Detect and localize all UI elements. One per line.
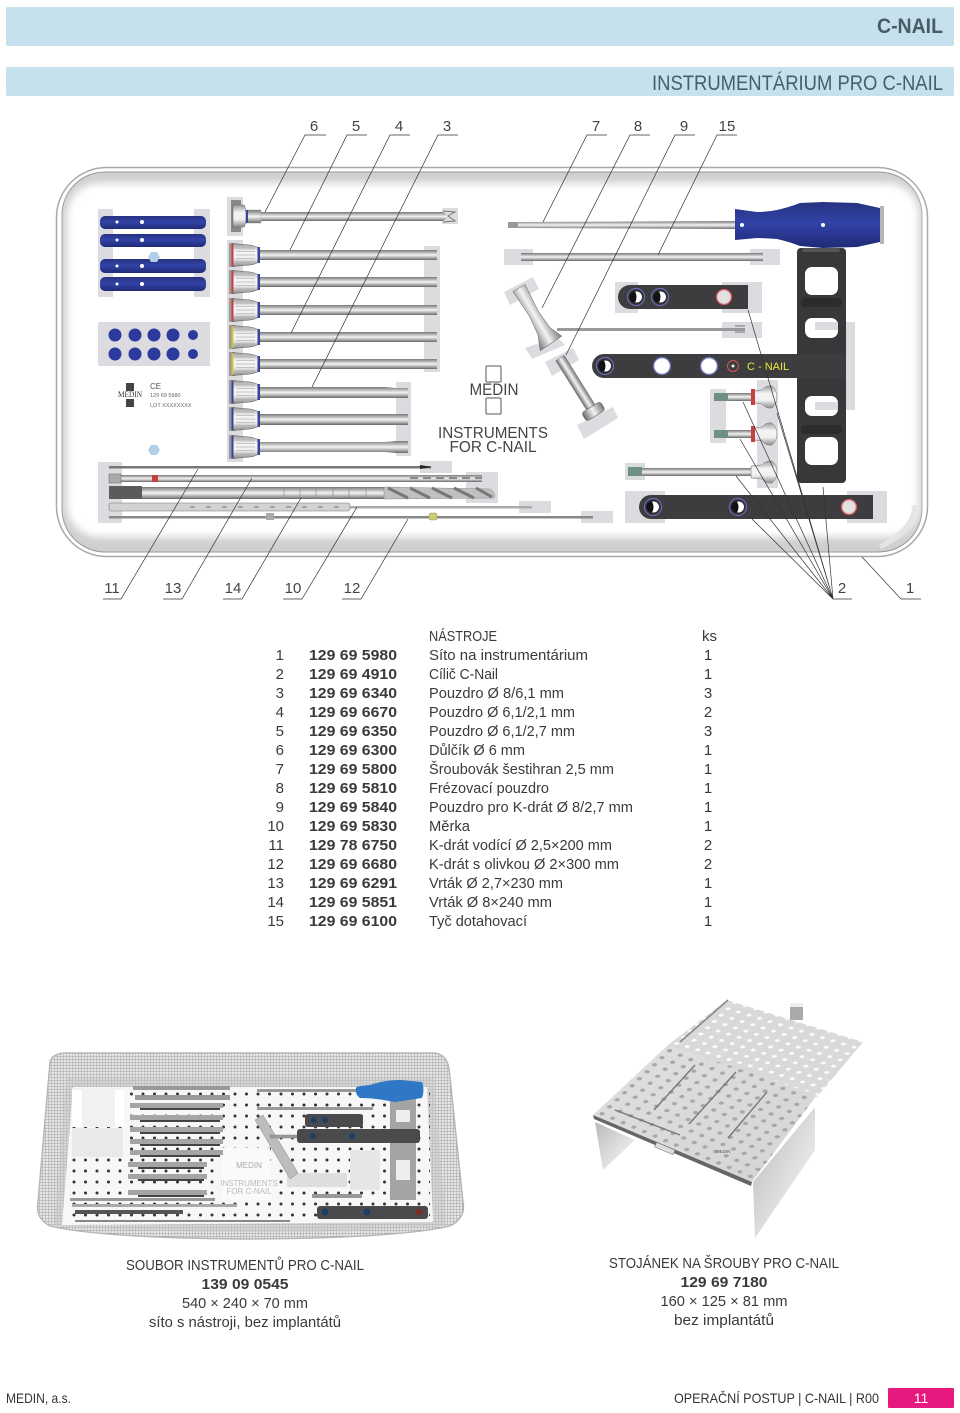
leader lines and numbers: 9: [680, 118, 688, 135]
perforated plate: [62, 1087, 433, 1225]
table rows: Pouzdro pro K-drát Ø 8/2,7 mm: [429, 799, 633, 816]
table rows: 3: [704, 723, 712, 740]
table rows: 1: [704, 666, 712, 683]
page number: 11: [914, 1390, 928, 1406]
table rows: 129 69 5980: [309, 647, 397, 664]
table rows: 3: [704, 685, 712, 702]
photo: blue handle: [356, 1080, 424, 1102]
instrument 2: targeting device: [592, 248, 873, 519]
table rows: 129 69 5810: [309, 780, 397, 797]
instrument 6: pin: [231, 200, 455, 232]
table rows: Tyč dotahovací: [429, 913, 528, 930]
caption: instrument set: [126, 1256, 364, 1331]
table rows: Důlčík Ø 6 mm: [429, 742, 525, 759]
table rows: 2: [704, 856, 712, 873]
table rows: 1: [704, 894, 712, 911]
table rows: 8: [276, 780, 284, 797]
instrument 14: drill 8: [109, 486, 494, 499]
footer document info: OPERAČNÍ POSTUP | C-NAIL | R00: [674, 1390, 879, 1406]
leader lines and numbers: 6: [310, 118, 318, 135]
leader lines and numbers: 11: [104, 580, 120, 597]
leader lines and numbers: 15: [719, 118, 735, 135]
short arm: [618, 285, 748, 309]
table rows: 7: [276, 761, 284, 778]
table rows: 2: [704, 837, 712, 854]
footer: [6, 1388, 954, 1408]
tray rim: [56, 168, 928, 556]
table rows: 6: [276, 742, 284, 759]
instrument 3: sleeves: [229, 380, 408, 459]
table rows: 1: [704, 799, 712, 816]
table rows: 1: [704, 780, 712, 797]
instrument group: blue tubes: [100, 216, 206, 291]
section heading band: [6, 67, 954, 96]
table rows: K-drát s olivkou Ø 2×300 mm: [429, 856, 619, 873]
caption: instrument set: 540 × 240 × 70 mm: [182, 1295, 308, 1312]
photo: dark arms: [297, 1114, 428, 1219]
caption: screw rack: bez implantátů: [674, 1312, 774, 1329]
table rows: 129 69 6350: [309, 723, 397, 740]
leader lines and numbers: 12: [344, 580, 360, 597]
table: instrument list: [267, 628, 717, 930]
tray logo and name: [438, 366, 548, 456]
middle arm: [592, 354, 845, 378]
table rows: 1: [276, 647, 284, 664]
panel: instrument tray: [56, 168, 928, 556]
perforated plate: FOR C-NAIL: [226, 1187, 272, 1196]
table rows: 129 69 6300: [309, 742, 397, 759]
table rows: 2: [276, 666, 284, 683]
table rows: Frézovací pouzdro: [429, 780, 549, 797]
table rows: Síto na instrumentárium: [429, 647, 588, 664]
table rows: Vrták Ø 2,7×230 mm: [429, 875, 563, 892]
rack legs: [595, 1107, 815, 1238]
leader lines and numbers: 13: [165, 580, 181, 597]
table rows: 1: [704, 913, 712, 930]
caption: instrument set: 139 09 0545: [202, 1276, 288, 1293]
table rows: 129 69 6670: [309, 704, 397, 721]
tray logo and name: MEDIN: [470, 380, 518, 399]
table rows: [267, 647, 712, 930]
table rows: 129 69 6680: [309, 856, 397, 873]
table rows: Šroubovák šestihran 2,5 mm: [429, 761, 614, 778]
mesh basket: [38, 1053, 463, 1239]
table header: NÁSTROJE: [429, 628, 497, 645]
table rows: Vrták Ø 8×240 mm: [429, 894, 552, 911]
chapter title: C-NAIL: [877, 15, 943, 38]
table rows: 129 69 6340: [309, 685, 397, 702]
tray logo and name: INSTRUMENTS: [438, 425, 548, 442]
perforated plate: MEDIN: [236, 1161, 262, 1170]
leader lines and numbers: 4: [395, 118, 403, 135]
table rows: 129 69 5800: [309, 761, 397, 778]
table rows: 4: [276, 704, 284, 721]
top header band: [6, 7, 954, 46]
bolts: [628, 386, 777, 483]
table rows: 129 69 5840: [309, 799, 397, 816]
table rows: 129 69 6100: [309, 913, 397, 930]
shafts on the plate: [70, 1086, 373, 1222]
table header: ks: [702, 628, 717, 645]
table rows: 9: [276, 799, 284, 816]
footer company: MEDIN, a.s.: [6, 1390, 71, 1406]
table rows: 129 69 5830: [309, 818, 397, 835]
table rows: 1: [704, 875, 712, 892]
photo: instrument set in mesh basket: [38, 1053, 463, 1239]
photo: screw rack: [593, 1000, 863, 1238]
caption: screw rack: [609, 1255, 839, 1329]
table rows: 129 69 5851: [309, 894, 397, 911]
leader lines and numbers: 5: [352, 118, 360, 135]
table rows: 12: [267, 856, 284, 873]
table rows: 129 69 6291: [309, 875, 397, 892]
leader lines and numbers: 10: [285, 580, 301, 597]
table rows: 13: [267, 875, 284, 892]
tray label: small Medin mark: [118, 382, 192, 409]
table rows: 1: [704, 818, 712, 835]
table rows: 1: [704, 761, 712, 778]
table rows: 129 78 6750: [309, 837, 397, 854]
instrument 10: gauge: [109, 503, 532, 511]
tray label: small Medin mark: LOT XXXXXXXX: [150, 403, 192, 409]
tray logo and name: FOR C-NAIL: [450, 439, 537, 456]
caption: screw rack: STOJÁNEK NA ŠROUBY PRO C-NAIL: [609, 1255, 839, 1272]
instrument 11: guide wire: [109, 465, 432, 469]
table rows: 5: [276, 723, 284, 740]
caption: instrument set: SOUBOR INSTRUMENTŮ PRO C-NAIL: [126, 1256, 364, 1274]
table rows: 1: [704, 742, 712, 759]
page number: [888, 1388, 954, 1408]
leader lines and numbers: [103, 118, 921, 599]
table rows: Cílič C-Nail: [429, 666, 498, 683]
tray label: small Medin mark: 129 69 5980: [150, 393, 181, 399]
vertical frame: [797, 248, 846, 483]
tray pads: grey backing areas: [98, 197, 887, 523]
middle arm: C - NAIL: [747, 361, 789, 373]
instrument 15: tightening rod: [521, 253, 763, 261]
leader lines and numbers: 1: [906, 580, 914, 597]
instrument 9: K-wire sleeve: [551, 352, 605, 421]
table rows: Pouzdro Ø 8/6,1 mm: [429, 685, 564, 702]
leader lines and numbers: 7: [592, 118, 600, 135]
rack plate: [593, 1045, 817, 1186]
table rows: 3: [276, 685, 284, 702]
table rows: Měrka: [429, 818, 471, 835]
leader lines and numbers: 2: [838, 580, 846, 597]
instrument 12: olive wire: [109, 513, 593, 520]
rack lid: [668, 1000, 863, 1097]
caption: screw rack: 160 × 125 × 81 mm: [660, 1293, 788, 1310]
leader lines and numbers: 14: [225, 580, 241, 597]
instrument 5 and 4: sleeves: [229, 243, 437, 376]
table rows: 11: [268, 837, 284, 854]
table rows: 15: [267, 913, 284, 930]
tray markers: pale blue hexagons: [148, 252, 160, 455]
rack plate: MEDIN: [716, 1149, 730, 1154]
instrument 7: hex screwdriver: [508, 202, 884, 248]
table rows: 1: [704, 647, 712, 664]
table rows: Pouzdro Ø 6,1/2,1 mm: [429, 704, 575, 721]
tray label: small Medin mark: MEDIN: [118, 390, 142, 399]
leader lines and numbers: 3: [443, 118, 451, 135]
table rows: 129 69 4910: [309, 666, 397, 683]
table rows: 2: [704, 704, 712, 721]
long arm: [639, 495, 873, 519]
table rows: 10: [267, 818, 284, 835]
tray label: small Medin mark: CE: [150, 382, 161, 391]
table rows: 14: [267, 894, 284, 911]
panel: implant holder with blue dots: [98, 322, 210, 366]
caption: instrument set: síto s nástroji, bez implantátů: [149, 1314, 341, 1331]
leader lines and numbers: 8: [634, 118, 642, 135]
photo: frame: [390, 1095, 416, 1200]
caption: screw rack: 129 69 7180: [680, 1274, 768, 1291]
table rows: K-drát vodící Ø 2,5×200 mm: [429, 837, 612, 854]
table rows: Pouzdro Ø 6,1/2,7 mm: [429, 723, 575, 740]
photo: sleeves: [255, 1115, 300, 1179]
perforated plate: INSTRUMENTS: [220, 1179, 278, 1188]
table header: [429, 628, 717, 645]
instrument 13: drill 2.7: [109, 474, 482, 483]
instrument 8: reaming sleeve: [508, 282, 745, 351]
